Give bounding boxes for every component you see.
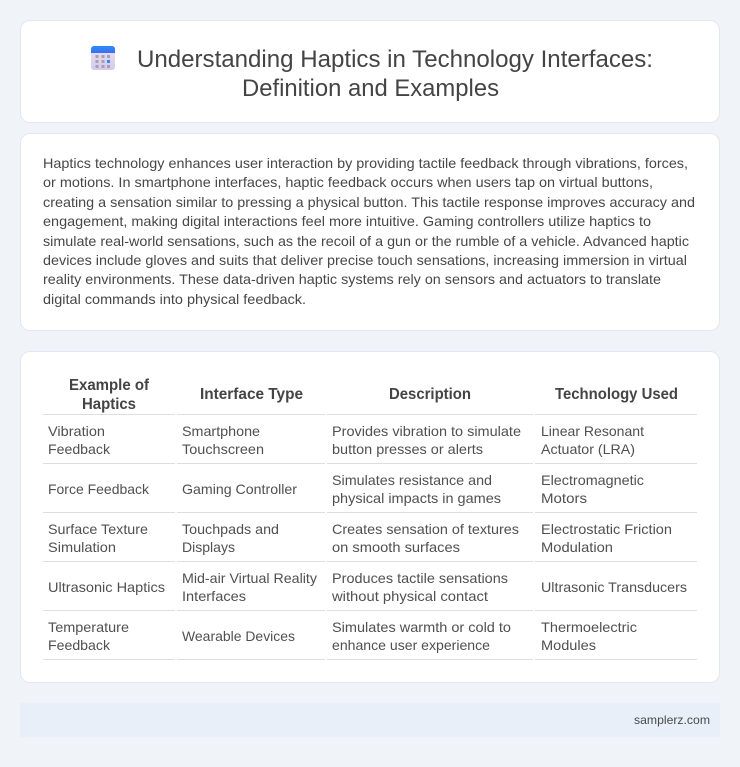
row: surface texture simulation: Surface Texture	[48, 521, 148, 537]
row: vibration feedback: Linear Resonant	[541, 423, 644, 439]
text block: description: reality environments. These data-driven haptic systems rely on sensors and actuators to translate	[43, 271, 661, 287]
table header: Technology Used	[555, 386, 678, 403]
title	[137, 46, 653, 102]
row: temperature feedback: Simulates warmth or cold to	[332, 619, 511, 635]
panel: title card	[20, 20, 720, 123]
row: surface texture simulation: Creates sensation of textures	[332, 521, 519, 537]
row: force feedback	[48, 472, 644, 506]
row: surface texture simulation: Touchpads and	[182, 521, 279, 537]
row: ultrasonic haptics: Ultrasonic Haptics	[48, 579, 165, 595]
row: vibration feedback: Touchscreen	[182, 441, 264, 457]
row: force feedback: physical impacts in games	[332, 490, 501, 506]
panel: footer bar	[20, 703, 720, 737]
text block: description: engagement, making digital interactions feel more intuitive. Gaming controllers utilize haptics to	[43, 213, 651, 229]
row: ultrasonic haptics: Ultrasonic Transducers	[541, 579, 687, 595]
row: temperature feedback: enhance user experience	[332, 637, 490, 653]
row: ultrasonic haptics: without physical contact	[331, 588, 488, 604]
title: Understanding Haptics in Technology Interfaces:	[137, 46, 653, 73]
row: vibration feedback: Vibration	[48, 423, 105, 439]
row: temperature feedback: Temperature	[48, 619, 129, 635]
row: surface texture simulation: Electrostatic Friction	[541, 521, 672, 537]
text block: description: or motions. In smartphone interfaces, haptic feedback occurs when users tap on virtual buttons,	[43, 174, 653, 190]
text block: description	[43, 155, 695, 307]
row: force feedback: Gaming Controller	[182, 481, 297, 497]
table header: Description	[389, 386, 471, 403]
text block: description: digital commands into physical feedback.	[43, 291, 306, 307]
row: vibration feedback: Feedback	[48, 441, 111, 457]
text block: description: creating a sensation similar to pressing a physical button. This tactile response improves accuracy and	[43, 194, 695, 210]
row: surface texture simulation: on smooth surfaces	[332, 539, 460, 555]
row: force feedback: Simulates resistance and	[332, 472, 492, 488]
row: force feedback: Force Feedback	[48, 481, 150, 497]
table header: Interface Type	[200, 386, 303, 403]
text block: description: Haptics technology enhances user interaction by providing tactile feedback through vibrations, forces,	[43, 155, 688, 171]
row: temperature feedback	[48, 619, 637, 653]
row: temperature feedback: Modules	[541, 637, 596, 653]
row: vibration feedback: Smartphone	[182, 423, 260, 439]
table header: Haptics	[82, 396, 136, 413]
row: temperature feedback: Feedback	[48, 637, 111, 653]
row: ultrasonic haptics	[48, 570, 687, 604]
row: vibration feedback: button presses or alerts	[332, 441, 483, 457]
row: surface texture simulation: Simulation	[48, 539, 116, 555]
row: vibration feedback: Actuator (LRA)	[541, 441, 635, 457]
footer: source label: samplerz.com	[634, 713, 710, 727]
row: temperature feedback: Thermoelectric	[541, 619, 637, 635]
row: ultrasonic haptics: Mid-air Virtual Reality	[182, 570, 317, 586]
row: ultrasonic haptics: Interfaces	[182, 588, 246, 604]
row: ultrasonic haptics: Produces tactile sensations	[332, 570, 508, 586]
table	[43, 377, 697, 660]
row: force feedback: Motors	[541, 490, 587, 506]
row: vibration feedback: Provides vibration to simulate	[332, 423, 521, 439]
row: force feedback: Electromagnetic	[541, 472, 644, 488]
text block: description: devices include gloves and suits that deliver precise touch sensations, increasing immersion in virtual	[43, 252, 687, 268]
row: vibration feedback	[48, 423, 644, 457]
row: surface texture simulation: Displays	[182, 539, 235, 555]
panel: table card	[20, 351, 720, 683]
text block: description: simulate real-world sensations, such as the recoil of a gun or the rumble of a vehicle. Advanced haptic	[43, 233, 689, 249]
row: temperature feedback: Wearable Devices	[182, 628, 295, 644]
row: surface texture simulation: Modulation	[541, 539, 613, 555]
table header: Example of	[69, 377, 150, 394]
title: Definition and Examples	[242, 75, 499, 102]
row: surface texture simulation	[48, 521, 672, 555]
icon: calendar	[91, 46, 115, 70]
panel: description card	[20, 133, 720, 331]
table header	[69, 377, 678, 413]
